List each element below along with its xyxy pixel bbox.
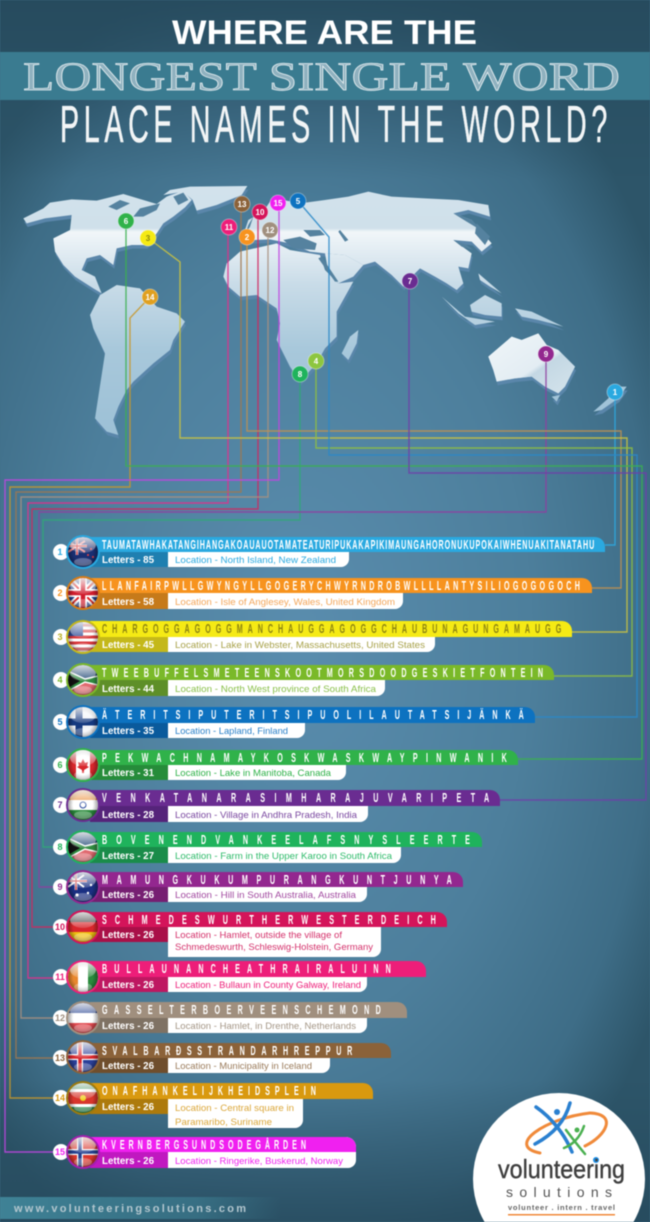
row 1 New Zealand: Letters - 85 [102,555,154,566]
row 1 New Zealand: Location - North Island, New Zealand [175,555,336,566]
row 9 Australia: Letters - 26 [102,890,154,901]
row 11 Ireland [53,960,426,994]
pin 12 [262,222,278,238]
row 11 Ireland: Letters - 26 [102,980,154,991]
row 10 Germany [53,910,447,957]
row 12 Netherlands [53,1001,407,1035]
row 4 South Africa [53,663,554,697]
pin 6 [118,213,134,229]
pin 2 [239,229,255,245]
title line 3: PLACE NAMES IN THE WORLD? [60,95,607,153]
pin 9 [538,346,554,362]
footer url: www.volunteeringsolutions.com [13,1203,246,1215]
pin 10 [252,204,268,220]
row 9 Australia: 9 [57,882,63,892]
row 15 Norway: Letters - 26 [102,1156,154,1167]
row 10 Germany: Letters - 26 [102,930,154,941]
row 8 South Africa: BOVENENDVANKEELAFSNYSLEERTE [102,834,470,848]
map pins [118,193,623,400]
row 15 Norway: Location - Ringerike, Buskerud, Norway [175,1156,343,1167]
row 2 United Kingdom: LLANFAIRPWLLGWYNGYLLGOGERYCHWYRNDROBWLLLLANTYSILIOGOGOGOCH [102,580,580,594]
row 3 United States: 3 [57,632,63,642]
pin 15 [270,195,286,211]
row 10 Germany: SCHMEDESWURTHERWESTERDEICH [102,914,436,928]
pin 1: 1 [613,388,618,397]
row 12 Netherlands: Location - Hamlet, in Drenthe, Netherlands [175,1021,356,1032]
row 8 South Africa [53,830,482,864]
row 15 Norway: 15 [55,1147,65,1157]
pin 3 [140,230,156,246]
row 5 Finland: Location - Lapland, Finland [175,726,288,737]
row 15 Norway: KVERNBERGSUNDSODEGÅRDEN [102,1137,306,1153]
row 8 South Africa: Location - Farm in the Upper Karoo in South Africa [175,851,393,862]
pin 15: 15 [274,199,283,208]
location text [175,930,373,953]
row 15 Norway [53,1135,356,1169]
pin 12: 12 [266,226,275,235]
row 9 Australia: Location - Hill in South Australia, Australia [175,890,357,901]
pin 4 [308,353,324,369]
panel: place name rows [53,535,605,1169]
pin 7: 7 [408,277,413,286]
row 7 India: Letters - 28 [102,810,154,821]
logo wordmark [498,1154,625,1216]
logo [473,1093,645,1222]
title line 2: LONGEST SINGLE WORD [23,54,620,99]
row 1 New Zealand: 1 [57,547,63,557]
row 12 Netherlands: GASSELTERBOERVEENSCHEMOND [102,1004,381,1018]
row 1 New Zealand: TAUMATAWHAKATANGIHANGAKOAUAUOTAMATEATURIPUKAKAPIKIMAUNGAHORONUKUPOKAIWHENUAKITANATAHU [102,539,594,553]
row 4 South Africa: 4 [57,675,63,685]
row 5 Finland: ÄTERITSIPUTERITSIPUOLILAUTATSIJÄNKÄ [102,707,524,723]
row 7 India: Location - Village in Andhra Pradesh, India [175,810,358,821]
row 2 United Kingdom: 2 [57,588,63,598]
title [0,14,650,153]
row 3 United States [53,620,572,654]
pin 10: 10 [256,208,265,217]
pin 11: 11 [225,223,234,232]
row 8 South Africa: Letters - 27 [102,851,154,862]
row 9 Australia: MAMUNGKUKUMPURANGKUNTJUNYA [102,874,452,888]
connector lines [5,201,646,1152]
location text [175,1103,294,1128]
row 13 Iceland: Letters - 26 [102,1061,154,1072]
row 6 Canada: Location - Lake in Manitoba, Canada [175,768,332,779]
pin 11 [221,219,237,235]
inland seas and gaps [108,193,490,282]
logo icon: swoosh and figures [527,1103,606,1163]
row 6 Canada: 6 [57,760,63,770]
row 3 United States: Letters - 45 [102,640,154,651]
row 7 India: VENKATANARASIMHARAJUVARIPETA [102,792,489,806]
pin 5: 5 [296,197,301,206]
pin 13 [234,196,250,212]
row 1 New Zealand [53,535,605,569]
row 4 South Africa: Location - North West province of South Africa [175,684,377,695]
pin 9: 9 [544,350,549,359]
row 6 Canada: Letters - 31 [102,768,154,779]
location text: Schmedeswurth, Schleswig-Holstein, Germany [175,942,373,953]
row 11 Ireland: BULLAUNANCHEATHRAIRALUINN [102,963,391,977]
row 14 Suriname: 14 [55,1093,65,1103]
row 8 South Africa: 8 [57,842,63,852]
pin 14 [142,289,158,305]
pin 7 [402,273,418,289]
row 12 Netherlands: Letters - 26 [102,1021,154,1032]
row 9 Australia [53,870,463,904]
map shadow [24,190,628,439]
pin 8: 8 [298,370,303,379]
row 4 South Africa: TWEEBUFFELSMETEENSKOOTMORSDOODGESKIETFONTEIN [102,667,543,681]
row 14 Suriname: ONAFHANKELIJKHEIDSPLEIN [102,1085,316,1099]
location text: Paramaribo, Suriname [175,1117,272,1128]
row 11 Ireland: 11 [55,972,65,982]
australia highlight [488,333,575,393]
row 6 Canada [53,748,518,782]
row 5 Finland: Letters - 35 [102,726,154,737]
world map [23,186,628,439]
pin 1 [607,384,623,400]
row 5 Finland: 5 [57,717,63,727]
row 2 United Kingdom [53,576,592,610]
row 13 Iceland: SVALBARÐSSTRANDARHREPPUR [102,1045,353,1059]
row 6 Canada: PEKWACHNAMAYKOSKWASKWAYPINWANIK [102,752,507,766]
title line 1: WHERE ARE THE [172,14,477,52]
pin 2: 2 [245,233,250,242]
logo wordmark: volunteer . intern . travel [508,1203,615,1212]
row 2 United Kingdom: Location - Isle of Anglesey, Wales, United Kingdom [175,597,395,608]
row 3 United States: CHARGOGGAGOGGMANCHAUGGAGOGGCHAUBUNAGUNGAMAUGG [102,623,561,637]
row 14 Suriname [53,1081,373,1128]
row 13 Iceland: 13 [55,1053,65,1063]
row 2 United Kingdom: Letters - 58 [102,597,154,608]
row 3 United States: Location - Lake in Webster, Massachusetts, United States [175,640,425,651]
row 14 Suriname: Letters - 26 [102,1102,154,1113]
row 7 India: 7 [57,800,63,810]
location text: Location - Central square in [175,1103,294,1114]
row 13 Iceland [53,1040,391,1074]
row 7 India [53,788,500,822]
pin 5 [290,193,306,209]
pin 6: 6 [124,217,129,226]
continents [23,186,627,435]
pin 8 [292,366,308,382]
row 13 Iceland: Location - Municipality in Iceland [175,1061,312,1072]
pin 3: 3 [146,234,151,243]
logo wordmark: volunteering [498,1154,625,1184]
logo wordmark: solutions [506,1184,612,1200]
location text: Location - Hamlet, outside the village of [175,930,342,941]
row 10 Germany: 10 [55,922,65,932]
pin 4: 4 [314,357,319,366]
pin 13: 13 [238,200,247,209]
row 11 Ireland: Location - Bullaun in County Galway, Ireland [175,980,361,991]
footer url [0,1197,280,1219]
row 4 South Africa: Letters - 44 [102,684,154,695]
pin 14: 14 [146,293,155,302]
row 5 Finland [53,705,535,739]
row 12 Netherlands: 12 [55,1013,65,1023]
title band [0,52,650,100]
